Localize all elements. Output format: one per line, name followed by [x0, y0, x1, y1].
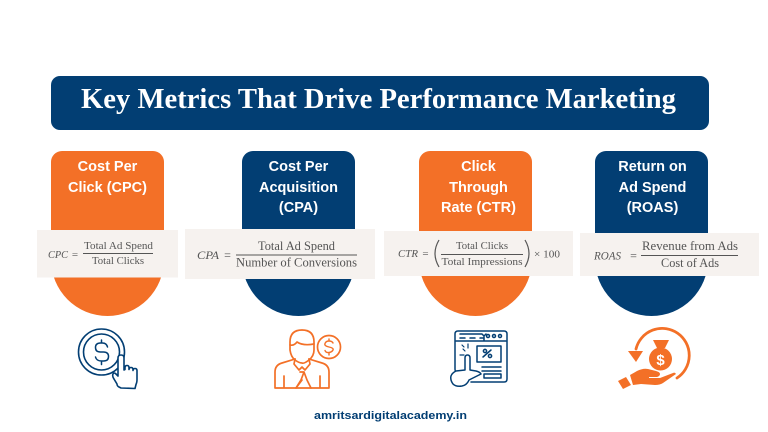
panel: click through rate: Through — [449, 180, 508, 196]
panel: cost per click — [37, 151, 178, 316]
panel: cost per click: Click (CPC) — [68, 180, 147, 196]
panel: click through rate: = — [422, 248, 429, 260]
panel: click through rate: Total Impressions — [442, 256, 522, 268]
panel: cost per click: Total Ad Spend — [84, 240, 153, 252]
title banner: Key Metrics That Drive Performance Marketing — [81, 83, 676, 115]
panel: click through rate: Rate (CTR) — [441, 200, 516, 216]
panel: cost per acquisition: CPA — [197, 248, 220, 262]
icon: browser window with clicking hand — [451, 331, 507, 386]
icon: money bag, return arrow and open hand — [618, 328, 689, 389]
panel: return on ad spend: Cost of Ads — [661, 256, 719, 270]
panel: return on ad spend: (ROAS) — [627, 200, 678, 216]
panel: cost per click: Total Clicks — [92, 255, 144, 267]
panel: return on ad spend: Revenue from Ads — [642, 239, 738, 253]
panel: return on ad spend: Ad Spend — [619, 180, 686, 196]
panel: cost per acquisition: Acquisition — [259, 180, 338, 196]
panel: click through rate: Total Clicks — [456, 240, 508, 252]
title banner — [51, 76, 709, 130]
icon: person with dollar coin — [275, 330, 340, 388]
panel: return on ad spend: = — [630, 248, 637, 262]
panel: click through rate: CTR — [398, 249, 419, 260]
panel: return on ad spend — [580, 151, 759, 316]
panel: cost per acquisition: Total Ad Spend — [258, 239, 336, 253]
icon: money bag, return arrow and open hand: $ — [656, 352, 665, 369]
panel: click through rate: × 100 — [534, 248, 560, 260]
panel: cost per acquisition: Number of Conversions — [236, 256, 357, 270]
panel: cost per acquisition: (CPA) — [279, 200, 318, 216]
panel: cost per acquisition: Cost Per — [269, 159, 329, 175]
panel: return on ad spend: ROAS — [593, 248, 621, 262]
panel: cost per acquisition: = — [224, 248, 231, 262]
footer website: amritsardigitalacademy.in — [314, 410, 467, 422]
panel: cost per click: Cost Per — [78, 159, 138, 175]
panel: cost per acquisition — [185, 151, 375, 316]
panel: cost per click: = — [72, 249, 78, 261]
icon: coin with pointing hand — [78, 329, 137, 388]
panel: return on ad spend: Return on — [618, 159, 687, 175]
panel: click through rate — [384, 151, 573, 316]
panel: click through rate: Click — [461, 159, 497, 175]
panel: cost per click: CPC — [48, 250, 69, 261]
